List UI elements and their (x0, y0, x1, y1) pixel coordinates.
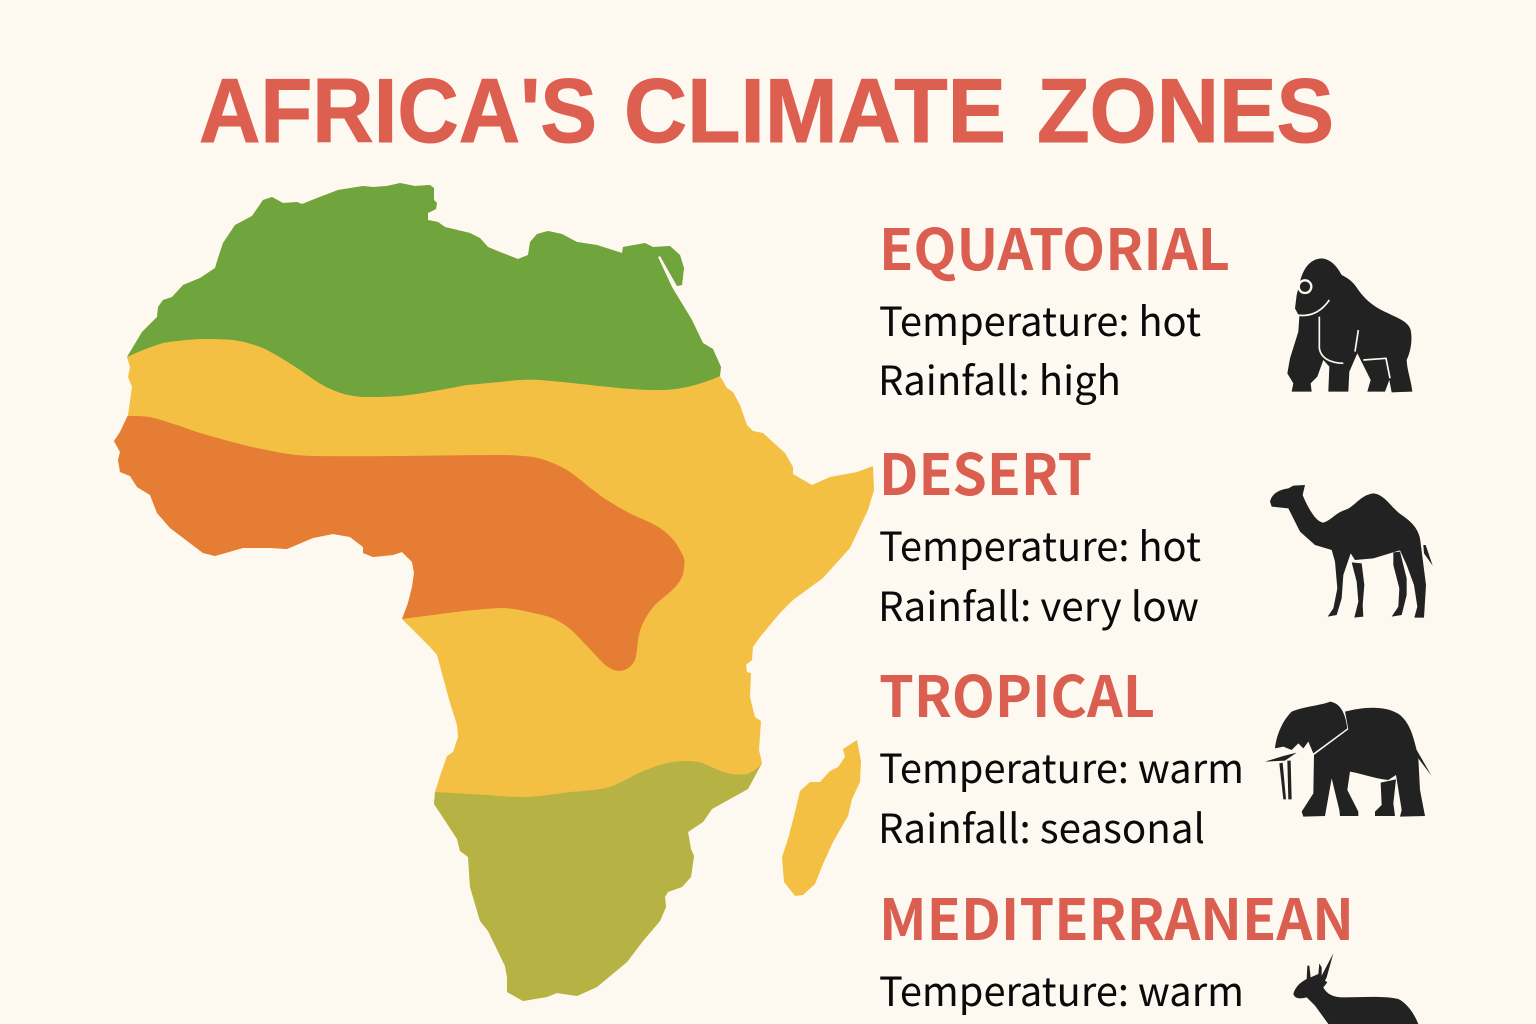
text: mediterranean temperature: Temperature: warm (879, 960, 1244, 1018)
map of Africa (100, 170, 900, 1020)
zone: central orange (100, 416, 685, 671)
text: tropical rainfall: Rainfall: seasonal (878, 797, 1205, 855)
title: AFRICA'S (199, 61, 597, 162)
title: ZONES (1037, 61, 1334, 162)
title: CLIMATE (624, 61, 1006, 162)
zone: north green (127, 183, 721, 397)
text: desert temperature: Temperature: hot (879, 515, 1201, 573)
icon: antelope (1293, 953, 1418, 1024)
heading: tropical: TROPICAL (879, 652, 1155, 734)
icon: camel (1270, 485, 1433, 618)
title (199, 61, 1334, 162)
text: tropical temperature: Temperature: warm (879, 737, 1244, 795)
heading: desert: DESERT (879, 430, 1092, 512)
heading: mediterranean: MEDITERRANEAN (879, 875, 1354, 957)
heading: equatorial: EQUATORIAL (879, 205, 1230, 287)
text: desert rainfall: Rainfall: very low (878, 575, 1199, 633)
text: equatorial temperature: Temperature: hot (879, 290, 1201, 348)
zone: south olive (434, 761, 762, 1001)
Madagascar (782, 740, 861, 896)
icon: gorilla (1287, 258, 1412, 392)
icon: elephant (1265, 702, 1432, 817)
text: equatorial rainfall: Rainfall: high (878, 349, 1121, 407)
